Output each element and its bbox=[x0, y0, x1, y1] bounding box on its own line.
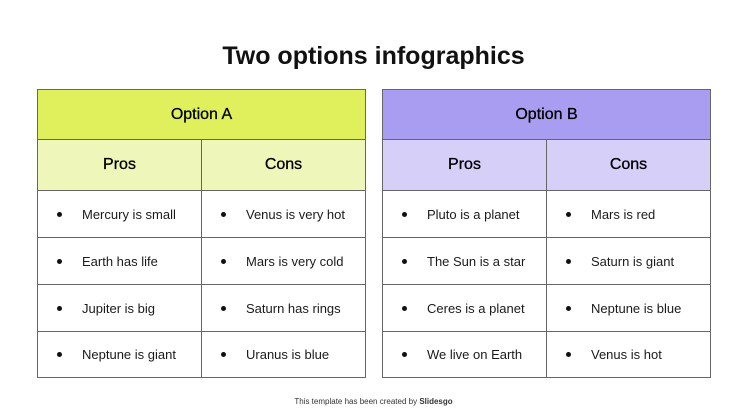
row B2 pro bbox=[383, 238, 547, 285]
header: option A bbox=[38, 90, 365, 140]
row A4 pro: Neptune is giant bbox=[82, 347, 176, 362]
row B1 pro bbox=[383, 191, 547, 238]
row A3 con bbox=[202, 285, 365, 332]
row A3 pro: Jupiter is big bbox=[82, 300, 155, 316]
row B3 pro bbox=[383, 285, 547, 332]
row B3 pro: Ceres is a planet bbox=[427, 300, 525, 316]
panel: option A bbox=[37, 89, 366, 378]
subheader: pros A bbox=[38, 140, 202, 191]
subheader: pros A: Pros bbox=[103, 156, 136, 173]
row B1 pro: Pluto is a planet bbox=[427, 206, 520, 222]
row B2 con bbox=[547, 238, 710, 285]
subheader: pros B bbox=[383, 140, 547, 191]
row B4 pro: We live on Earth bbox=[427, 347, 522, 362]
row A1 con bbox=[202, 191, 365, 238]
subheader: cons A bbox=[202, 140, 365, 191]
header: option B bbox=[383, 90, 710, 140]
row A4 con: Uranus is blue bbox=[246, 347, 329, 362]
row A3 con: Saturn has rings bbox=[246, 300, 341, 316]
row A2 pro bbox=[38, 238, 202, 285]
row B3 con: Neptune is blue bbox=[591, 300, 681, 316]
row B2 pro: The Sun is a star bbox=[427, 254, 525, 268]
subheader: cons A: Cons bbox=[265, 156, 302, 173]
row B1 con: Mars is red bbox=[591, 206, 655, 222]
row B4 pro bbox=[383, 332, 547, 377]
title: Two options infographics bbox=[222, 42, 525, 70]
row A1 con: Venus is very hot bbox=[246, 206, 345, 222]
row A4 pro bbox=[38, 332, 202, 377]
header: option B: Option B bbox=[515, 106, 578, 122]
footer credit: This template has been created by Slidesgo bbox=[294, 397, 453, 406]
row A1 pro bbox=[38, 191, 202, 238]
subheader: cons B: Cons bbox=[610, 156, 647, 173]
subheader: cons B bbox=[547, 140, 710, 191]
row A1 pro: Mercury is small bbox=[82, 206, 176, 222]
row A2 con bbox=[202, 238, 365, 285]
row A2 con: Mars is very cold bbox=[246, 254, 344, 268]
row A2 pro: Earth has life bbox=[82, 254, 158, 268]
row B4 con: Venus is hot bbox=[591, 347, 662, 362]
subheader: pros B: Pros bbox=[448, 156, 481, 173]
row B3 con bbox=[547, 285, 710, 332]
header: option A: Option A bbox=[171, 106, 232, 122]
panel: option B bbox=[382, 89, 711, 378]
row B2 con: Saturn is giant bbox=[591, 254, 674, 268]
row B1 con bbox=[547, 191, 710, 238]
row A3 pro bbox=[38, 285, 202, 332]
